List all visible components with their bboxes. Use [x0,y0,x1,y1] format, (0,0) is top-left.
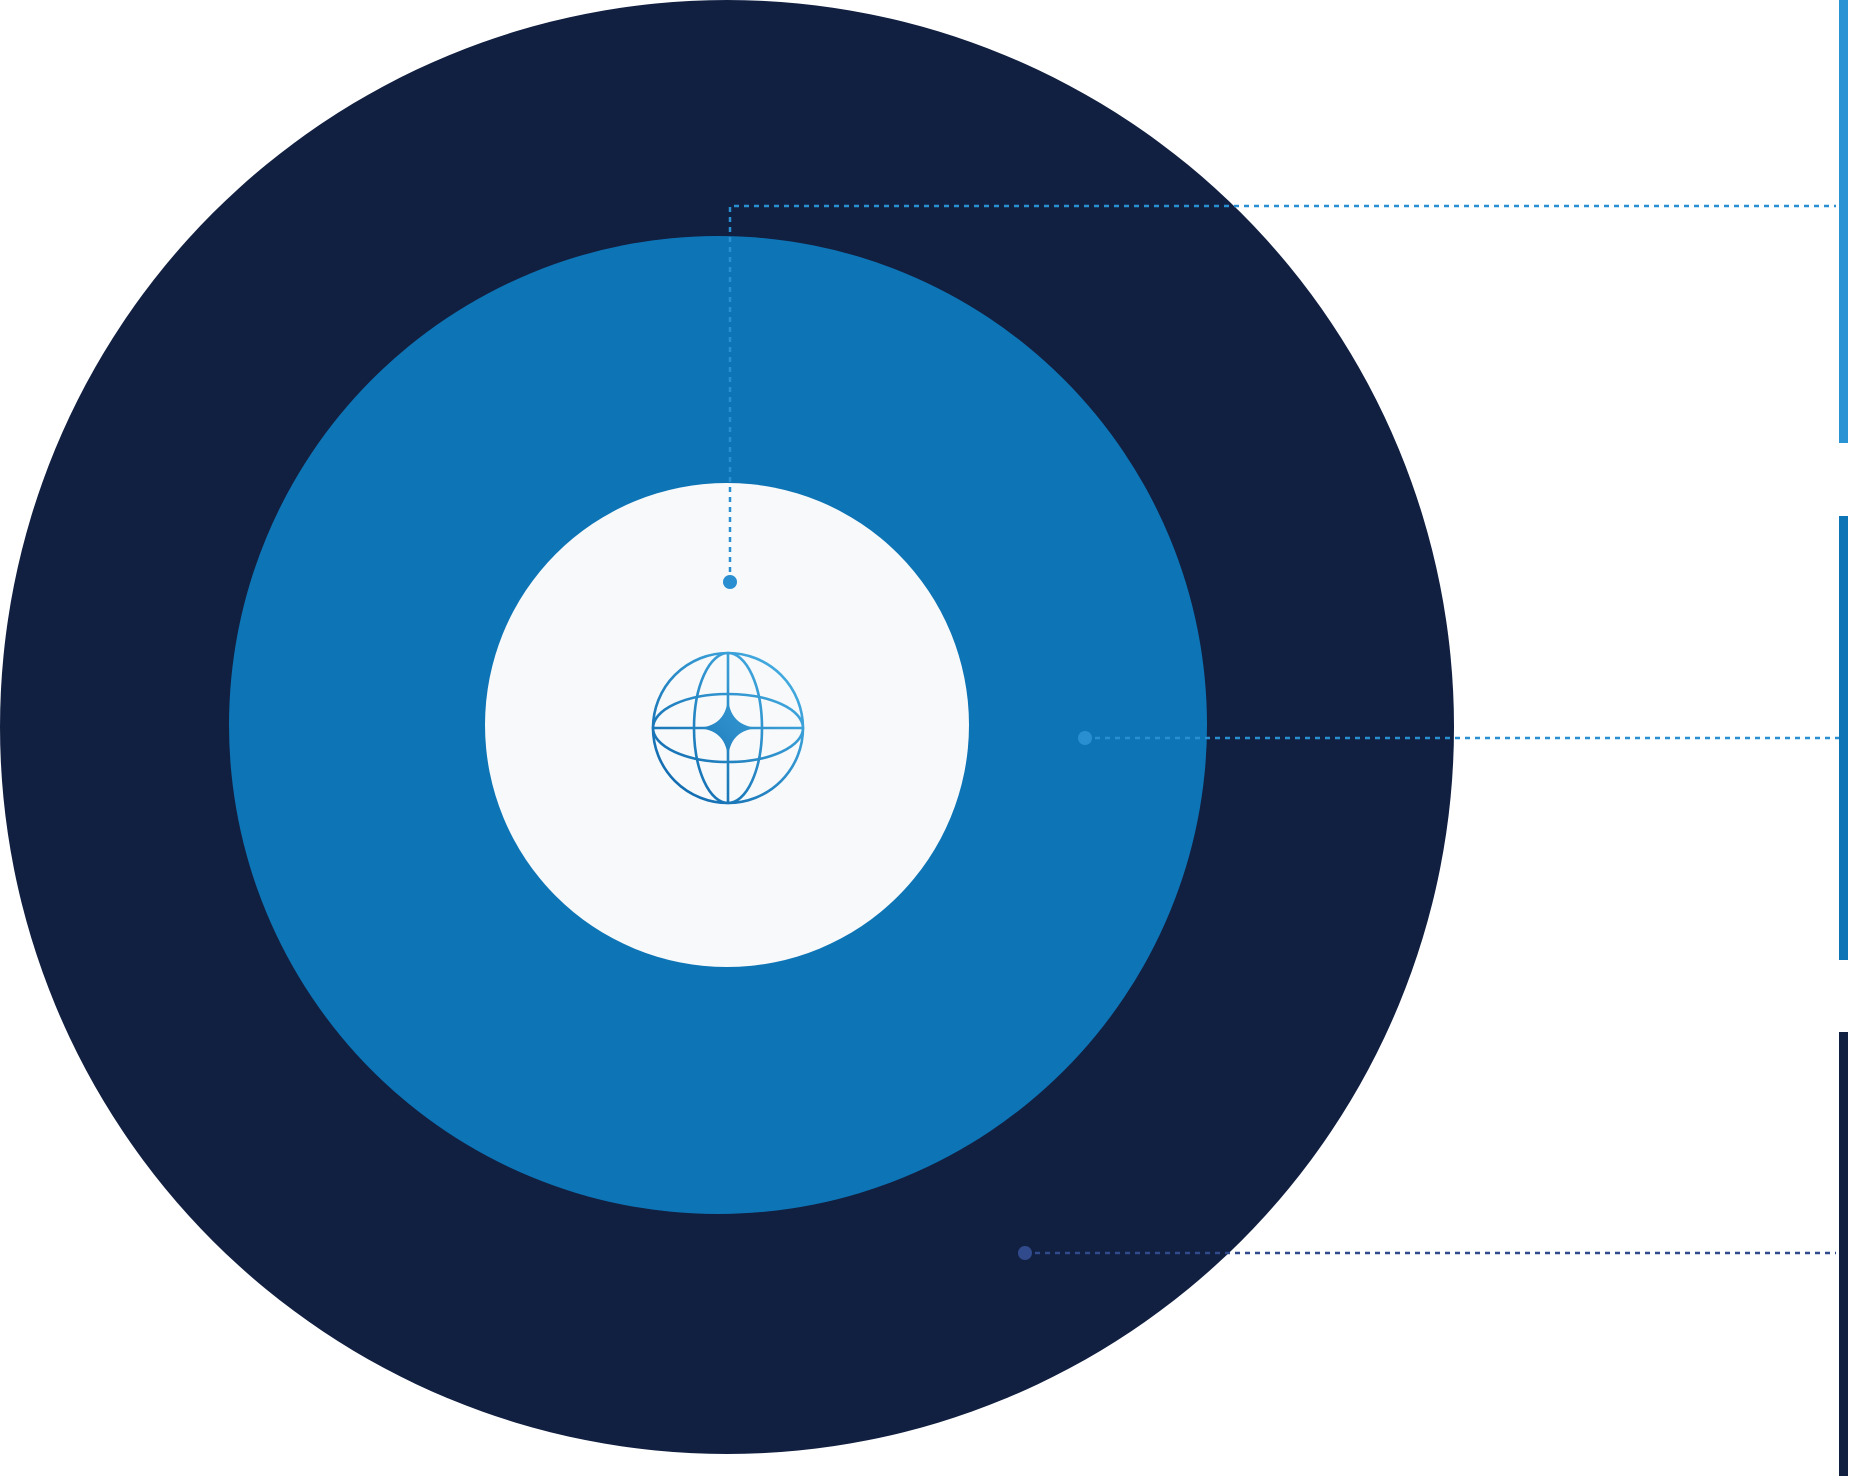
connector: middle ring to middle bar [1078,731,1839,745]
connector: core to top bar [723,206,1836,589]
bar: middle [1839,516,1848,960]
bar: bottom [1839,1032,1848,1476]
inner core: light [485,483,969,967]
outer ring: dark navy [0,0,1454,1454]
middle ring: blue [229,236,1207,1214]
icon: globe with star [653,653,803,803]
bar: top [1839,0,1848,443]
connector: outer ring to bottom bar [1018,1246,1836,1260]
